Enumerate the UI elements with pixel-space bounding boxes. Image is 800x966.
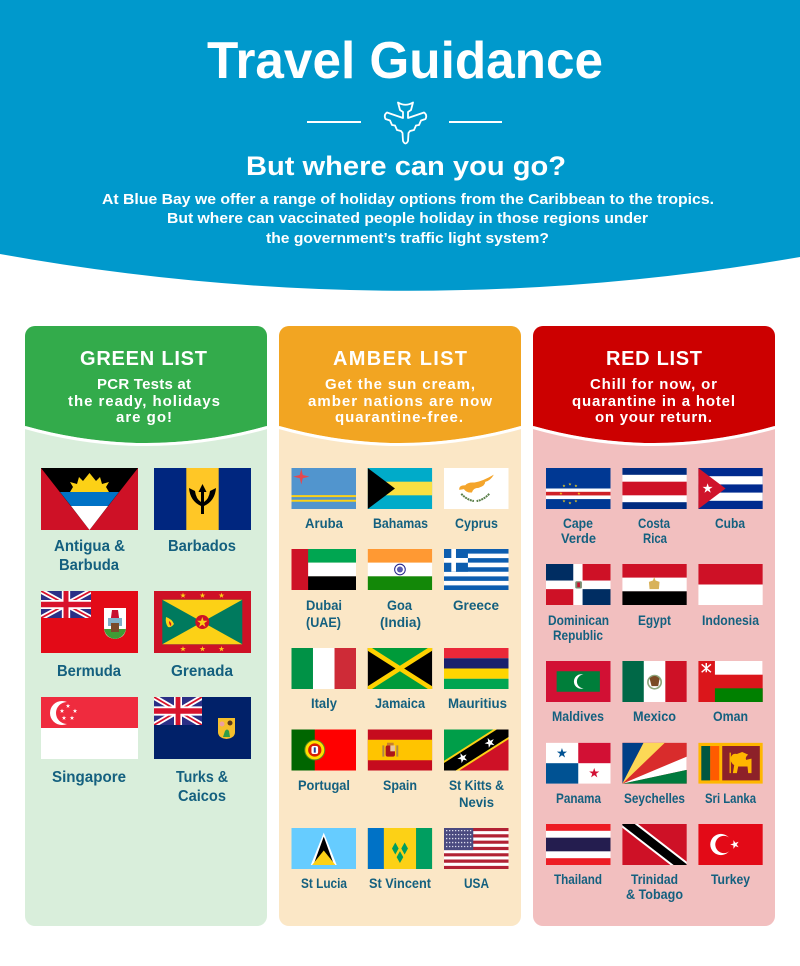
- tagline: amber nations are now: [308, 393, 492, 410]
- header banner: [0, 0, 800, 291]
- country: Antigua & Barbuda: [41, 468, 138, 574]
- country: Bahamas: Bahamas: [373, 515, 428, 531]
- intro paragraph: But where can vaccinated people holiday in those regions under: [167, 210, 648, 227]
- country: Bermuda: Bermuda: [57, 663, 121, 680]
- heading: RED LIST: [606, 348, 702, 370]
- heading: AMBER LIST: [333, 348, 467, 370]
- country: Panama: [546, 743, 610, 806]
- country: Dominican Republic: Dominican: [548, 612, 609, 628]
- country: Spain: Spain: [383, 777, 417, 793]
- country: Antigua & Barbuda: Barbuda: [59, 557, 119, 574]
- country: Portugal: Portugal: [298, 777, 350, 793]
- country: St Vincent: St Vincent: [369, 875, 431, 891]
- tagline: the ready, holidays: [68, 393, 220, 410]
- subtitle: But where can you go?: [246, 151, 566, 181]
- country: Indonesia: Indonesia: [702, 612, 759, 628]
- country: Barbados: [154, 468, 251, 555]
- country: Goa (India): (India): [380, 614, 421, 630]
- country: Trinidad & Tobago: & Tobago: [626, 886, 683, 902]
- country: Dominican Republic: Republic: [553, 627, 603, 643]
- country: Sri Lanka: Sri Lanka: [705, 790, 756, 806]
- panel: green list: [25, 326, 267, 926]
- country: St Vincent: [368, 828, 432, 891]
- country: Cape Verde: [546, 468, 610, 546]
- country: Cuba: Cuba: [715, 515, 745, 531]
- country: Goa (India): [368, 549, 432, 630]
- intro paragraph: the government’s traffic light system?: [266, 230, 549, 247]
- country: Singapore: Singapore: [52, 769, 126, 786]
- panel: red list: [533, 326, 775, 926]
- country: Turks & Caicos: Turks &: [176, 769, 228, 786]
- country: Mauritius: Mauritius: [448, 695, 507, 711]
- country: Trinidad & Tobago: Trinidad: [631, 871, 678, 887]
- country: Thailand: [546, 824, 610, 887]
- tagline: are go!: [116, 409, 172, 426]
- country: Spain: [368, 730, 432, 793]
- country: Dubai (UAE): (UAE): [306, 614, 341, 630]
- country: Cyprus: Cyprus: [455, 515, 498, 531]
- country: Thailand: Thailand: [554, 871, 602, 887]
- country: Cuba: [698, 468, 763, 531]
- tagline: Chill for now, or: [590, 376, 717, 393]
- country: Costa Rica: [622, 468, 687, 546]
- country: St Lucia: [292, 828, 356, 891]
- country: Turkey: [698, 824, 763, 887]
- panel: amber list: [279, 326, 521, 926]
- intro paragraph: [102, 191, 714, 247]
- country: Egypt: Egypt: [638, 612, 671, 628]
- country: Portugal: [292, 730, 356, 793]
- country: USA: [444, 828, 508, 891]
- country: USA: USA: [464, 875, 489, 891]
- tagline: [572, 376, 735, 426]
- country: Dominican Republic: [546, 564, 610, 643]
- country: Seychelles: [622, 743, 687, 806]
- country: Maldives: [546, 661, 610, 724]
- tagline: [308, 376, 492, 426]
- country: Sri Lanka: [698, 743, 763, 806]
- country: Indonesia: [698, 564, 763, 628]
- tagline: quarantine-free.: [335, 409, 463, 426]
- country: Aruba: [292, 468, 356, 531]
- country: Aruba: Aruba: [305, 515, 343, 531]
- country: Oman: Oman: [713, 708, 748, 724]
- country: Cyprus: [444, 468, 508, 531]
- country: Trinidad & Tobago: [622, 821, 687, 902]
- country: Oman: [698, 661, 763, 724]
- tagline: [68, 376, 220, 426]
- country: Turkey: Turkey: [711, 871, 750, 887]
- country: Bahamas: [368, 468, 432, 531]
- title: Travel Guidance: [207, 32, 603, 90]
- country: Seychelles: Seychelles: [624, 790, 685, 806]
- country: Jamaica: Jamaica: [375, 695, 425, 711]
- country: Bermuda: [41, 591, 138, 680]
- country: Costa Rica: Costa: [638, 515, 670, 531]
- country: St Kitts & Nevis: St Kitts &: [449, 777, 504, 793]
- country: Greece: [444, 549, 508, 613]
- country: Cape Verde: Verde: [561, 530, 596, 546]
- country: Dubai (UAE): Dubai: [306, 597, 342, 613]
- country: Greece: Greece: [453, 597, 499, 613]
- country: Jamaica: [368, 648, 432, 711]
- country: Dubai (UAE): [292, 549, 356, 630]
- country: Goa (India): Goa: [387, 597, 412, 613]
- country: St Kitts & Nevis: Nevis: [459, 794, 494, 810]
- country: Italy: Italy: [311, 695, 337, 711]
- country: Panama: Panama: [556, 790, 601, 806]
- country: St Lucia: St Lucia: [301, 875, 347, 891]
- heading: GREEN LIST: [80, 348, 207, 370]
- icon: airplane with side rules: [307, 102, 502, 144]
- country: Cape Verde: Cape: [563, 515, 593, 531]
- country: Italy: [292, 648, 356, 711]
- country: Grenada: Grenada: [171, 663, 233, 680]
- country: Singapore: [41, 697, 138, 786]
- country: St Kitts & Nevis: [444, 730, 508, 810]
- tagline: Get the sun cream,: [325, 376, 475, 393]
- country: Maldives: Maldives: [552, 708, 604, 724]
- country: Costa Rica: Rica: [643, 530, 667, 546]
- country: Mauritius: [444, 648, 508, 711]
- tagline: quarantine in a hotel: [572, 393, 735, 410]
- intro paragraph: At Blue Bay we offer a range of holiday options from the Caribbean to the tropics.: [102, 191, 714, 208]
- tagline: on your return.: [595, 409, 712, 426]
- country: Turks & Caicos: [154, 697, 251, 805]
- tagline: PCR Tests at: [97, 376, 191, 393]
- country: Grenada: [154, 591, 251, 680]
- country: Egypt: [622, 564, 687, 628]
- country: Barbados: Barbados: [168, 538, 236, 555]
- country: Mexico: Mexico: [633, 708, 676, 724]
- country: Turks & Caicos: Caicos: [178, 788, 226, 805]
- country: Mexico: [622, 661, 687, 724]
- country: Antigua & Barbuda: Antigua &: [54, 538, 125, 555]
